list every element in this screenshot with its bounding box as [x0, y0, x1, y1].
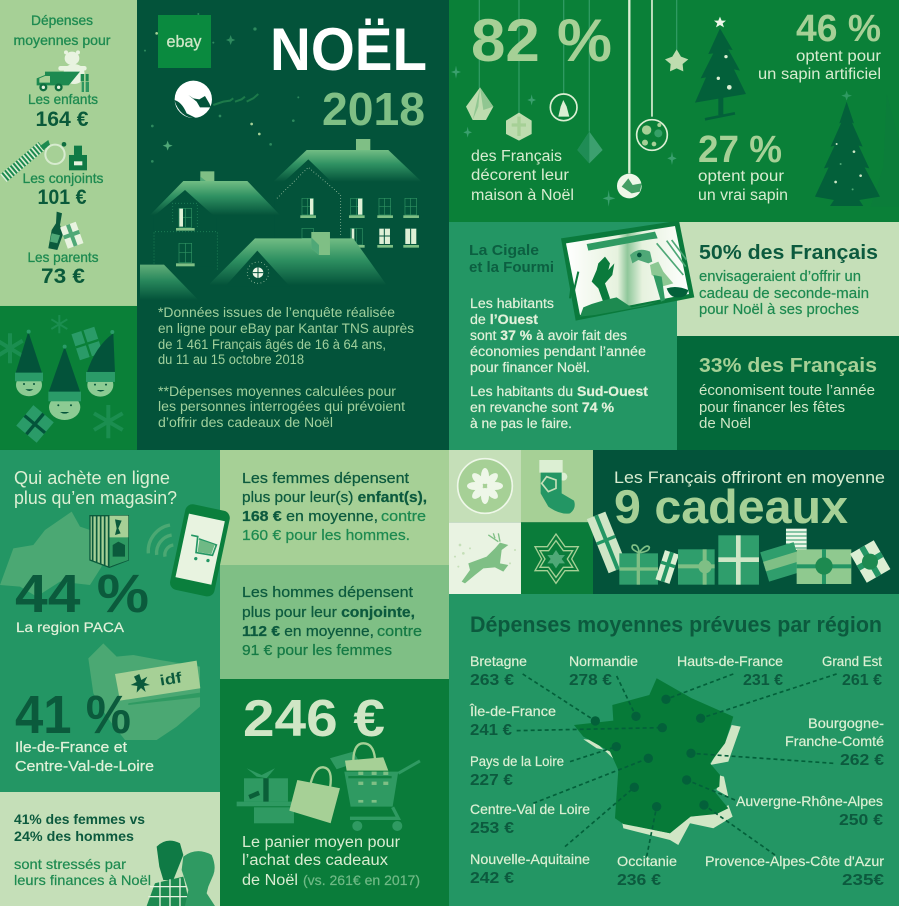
- text: économisent: pour financer les fêtes: [699, 400, 845, 416]
- text: hommes dépensent: plus pour leur conjointe,: [242, 605, 415, 621]
- heading: 33 %: 33% des Français: [699, 355, 877, 377]
- labels: regions: Bourgogne-: [808, 715, 884, 731]
- text: femmes vs hommes: [14, 812, 145, 844]
- elf: left: [15, 330, 43, 396]
- heading: qui achète: plus qu’en magasin?: [14, 488, 177, 508]
- labels: regions: Franche-Comté: [785, 733, 884, 749]
- labels: regions: Provence-Alpes-Côte d'Azur: [705, 853, 884, 869]
- text: des Français décorent: [471, 148, 574, 204]
- text: sources: **Dépenses moyennes calculées pour: [158, 384, 397, 399]
- panel: 33 % des Français: [677, 336, 899, 450]
- icon: toys: [37, 50, 89, 92]
- title: NOËL: NOËL: [270, 16, 427, 83]
- text: hommes dépensent: Les hommes dépensent: [242, 585, 413, 601]
- labels: regions: Pays de la Loire: [470, 753, 564, 769]
- text: seconde-main: [699, 269, 869, 318]
- labels: regions: Centre-Val de Loire: [470, 801, 590, 817]
- stat: 9 cadeaux: 9 cadeaux: [614, 480, 848, 533]
- text: des Français décorent: décorent leur: [471, 167, 569, 184]
- title: 2018: 2018: [322, 83, 425, 135]
- logo: ebay: ebay: [166, 32, 202, 51]
- panel: tiles: [449, 450, 593, 595]
- stat: 27 %: [698, 129, 788, 204]
- tile: stocking: [521, 450, 593, 522]
- house: front: [210, 232, 387, 287]
- text: habitants de l'Ouest: économies pendant l’année: [470, 344, 646, 359]
- panel: stress: [0, 792, 220, 906]
- text: sources: d’offrir des cadeaux de Noël: [158, 415, 333, 430]
- values: regions: 236 €: [617, 872, 661, 889]
- label: conjoints: 101 €: [38, 186, 87, 209]
- text: sources: *Données issues de l’enquête réalisée: [158, 305, 395, 320]
- panel: décorations et sapins: [449, 0, 899, 222]
- text: habitants de l'Ouest: pour financer Noël.: [470, 360, 590, 375]
- map: Ile-de-France: [88, 643, 200, 740]
- panel: elves: [0, 306, 137, 450]
- label: conjoints: Les conjoints: [22, 170, 104, 186]
- text: femmes vs hommes: 41% des femmes vs: [14, 812, 145, 827]
- house: back right: [273, 139, 422, 248]
- labels: regions: Hauts-de-France: [677, 653, 783, 669]
- label: enfants: Les enfants: [28, 91, 98, 107]
- labels: regions: Normandie: [569, 653, 638, 669]
- house: left: [150, 171, 280, 272]
- label: conjoints: [22, 170, 104, 209]
- heading: dépenses moyennes prévues par région: Dépenses moyennes prévues par région: [470, 612, 882, 637]
- icon: real tree: [815, 91, 899, 207]
- heading: dépenses moyennes pour: Dépenses: [31, 13, 93, 28]
- stat: 46 %: 46 %: [796, 8, 881, 50]
- heading: la cigale et la fourmi: [469, 242, 554, 276]
- text: offriront: Les Français offriront en moyenne: [614, 468, 885, 487]
- panel: dépenses moyennes: [0, 0, 137, 306]
- text: seconde-main: pour Noël à ses proches: [699, 302, 859, 318]
- icon: idf flag: [115, 661, 200, 705]
- text: femmes dépensent: contre: [381, 509, 426, 525]
- text: habitants de l'Ouest: Les habitants du Sud-Ouest: [470, 384, 649, 399]
- elf: right: [86, 330, 115, 397]
- stat: 41 %: 41 %: [15, 685, 131, 745]
- house: bottom left: [140, 265, 198, 300]
- panel: 9 cadeaux: [587, 450, 899, 594]
- labels: regions: Grand Est: [822, 653, 882, 669]
- text: habitants de l'Ouest: à ne pas le faire.: [470, 416, 572, 431]
- label: parents: 73 €: [41, 265, 85, 288]
- stat: 46 %: un sapin artificiel: [758, 66, 881, 83]
- text: Ile-de-France et Centre: Centre-Val-de-Loire: [15, 759, 154, 775]
- values: regions: 231 €: [743, 672, 783, 689]
- text: habitants de l'Ouest: Les habitants: [470, 296, 554, 311]
- icon: coat of arms: [90, 516, 128, 567]
- values: regions: 242 €: [470, 870, 514, 887]
- illustration: book: [561, 221, 694, 321]
- label: enfants: [28, 91, 98, 131]
- stat: 46 %: optent pour: [796, 48, 881, 65]
- icon: idf flag: idf: [159, 669, 184, 690]
- text: hommes dépensent: 91 € pour les femmes: [242, 643, 392, 659]
- panel: 50 % des Français: [677, 222, 899, 336]
- heading: la cigale et la fourmi: La Cigale: [469, 242, 539, 259]
- icon: phone: [148, 503, 231, 598]
- values: regions: 253 €: [470, 820, 514, 837]
- text: femmes dépensent: Les femmes dépensent: [242, 471, 409, 487]
- text: femmes dépensent: 168 € en moyenne,: [242, 509, 378, 525]
- panel: hommes: [220, 565, 449, 679]
- text: sources: [158, 305, 414, 430]
- text: panier moyen: (vs. 261€ en 2017): [303, 873, 420, 888]
- values: regions: 261 €: [842, 672, 882, 689]
- panel: femmes: [220, 450, 449, 565]
- text: des Français décorent: des Français: [471, 148, 562, 165]
- text: hommes dépensent: 112 € en moyenne,: [242, 624, 374, 640]
- text: panier moyen: Le panier moyen pour: [242, 834, 400, 851]
- gift: bottom: [16, 405, 54, 443]
- label: enfants: 164 €: [36, 108, 89, 131]
- text: femmes dépensent: plus pour leur(s) enfant(s),: [242, 490, 427, 506]
- leader lines: [517, 674, 837, 857]
- text: économisent: [699, 383, 875, 432]
- labels: regions: Nouvelle-Aquitaine: [470, 851, 590, 867]
- tile: snowflake: [449, 450, 521, 522]
- values: regions: 227 €: [470, 772, 513, 789]
- values: regions: 250 €: [839, 812, 883, 829]
- values: regions: 278 €: [569, 672, 612, 689]
- icon: man and woman: [147, 841, 215, 906]
- stat: 27 %: un vrai sapin: [698, 187, 788, 204]
- text: économisent: de Noël: [699, 416, 751, 432]
- heading: qui achète: Qui achète en ligne: [14, 468, 170, 488]
- text: la region PACA: La region PACA: [16, 619, 125, 635]
- stat: 27 %: optent pour: [698, 168, 784, 185]
- text: sources: du 11 au 15 octobre 2018: [158, 352, 304, 367]
- icon: gifts, bag and cart: [237, 743, 420, 831]
- icon: tie, watch, perfume: [3, 140, 87, 178]
- icon: artificial tree: [695, 17, 746, 119]
- text: habitants de l'Ouest: [470, 296, 649, 431]
- panel: panier moyen: [220, 679, 449, 906]
- label: parents: [28, 249, 98, 288]
- panel: dépenses par région: [449, 594, 899, 906]
- text: panier moyen: l’achat des cadeaux: [242, 852, 388, 869]
- labels: regions: Occitanie: [617, 853, 677, 869]
- heading: dépenses moyennes pour: [14, 13, 111, 48]
- text: Ile-de-France et Centre: [15, 740, 154, 775]
- illustration: gifts: [587, 512, 890, 585]
- stat: 44 %: 44 %: [15, 564, 149, 624]
- panel: la cigale et la fourmi: [449, 222, 677, 450]
- text: seconde-main: envisageraient d’offrir un: [699, 269, 861, 285]
- values: regions: 263 €: [470, 672, 514, 689]
- stat: 27 %: 27 %: [698, 129, 782, 171]
- icon: moon and sleigh: [174, 81, 258, 118]
- snowflakes: [0, 315, 123, 438]
- panel: qui achète en ligne: [0, 450, 231, 792]
- text: femmes dépensent: 160 € pour les hommes.: [242, 528, 410, 544]
- icon: bottle and gift: [48, 212, 83, 250]
- text: sources: les personnes interrogées qui prévoient: [158, 399, 405, 414]
- values: regions: 262 €: [840, 752, 884, 769]
- text: Ile-de-France et Centre: Ile-de-France et: [15, 740, 127, 756]
- heading: la cigale et la fourmi: et la Fourmi: [469, 259, 554, 276]
- text: stressés: [14, 856, 151, 888]
- text: hommes dépensent: [242, 585, 422, 659]
- text: panier moyen: de Noël: [242, 872, 298, 889]
- stat: 46 %: [758, 8, 881, 83]
- labels: regions: Bretagne: [470, 653, 527, 669]
- labels: regions: Auvergne-Rhône-Alpes: [736, 793, 883, 809]
- tile: reindeer: [449, 522, 521, 595]
- stars: [144, 13, 299, 163]
- labels: regions: Île-de-France: [469, 703, 556, 719]
- panel: hero: [137, 0, 449, 450]
- values: regions: 235€: [842, 872, 884, 889]
- text: femmes vs hommes: 24% des hommes: [14, 829, 134, 844]
- label: parents: Les parents: [28, 249, 98, 265]
- labels: regions: [469, 653, 884, 869]
- text: stressés: sont stressés par: [14, 856, 126, 872]
- values: regions: 241 €: [470, 722, 512, 739]
- text: sources: de 1 461 Français âgés de 16 à 64 ans,: [158, 337, 386, 352]
- tile: star: [521, 522, 593, 595]
- heading: 50 %: 50% des Français: [699, 242, 878, 264]
- gift: top: [71, 327, 103, 360]
- values: regions: [470, 672, 884, 889]
- text: des Français décorent: maison à Noël: [471, 187, 574, 204]
- text: seconde-main: cadeau de seconde-main: [699, 286, 869, 302]
- text: sources: en ligne pour eBay par Kantar TNS auprès: [158, 321, 414, 336]
- text: habitants de l'Ouest: sont 37 % à avoir fait des: [470, 328, 627, 343]
- logo: ebay: [158, 15, 211, 68]
- text: économisent: économisent toute l’année: [699, 383, 875, 399]
- stat: 246 €: 246 €: [243, 690, 385, 748]
- elf: centre: [48, 345, 81, 420]
- map: PACA: [0, 512, 102, 597]
- illustration: houses: [140, 139, 422, 300]
- ornaments: [451, 0, 688, 207]
- stat: 82 %: 82 %: [471, 7, 612, 74]
- heading: qui achète: [14, 468, 177, 508]
- heading: dépenses moyennes pour: moyennes pour: [14, 33, 111, 48]
- text: panier moyen: [242, 834, 420, 889]
- map: France: [574, 678, 741, 845]
- text: femmes dépensent: [242, 471, 427, 544]
- text: stressés: leurs finances à Noël: [14, 872, 151, 888]
- text: habitants de l'Ouest: en revanche sont 74 %: [470, 400, 614, 415]
- text: hommes dépensent: contre: [377, 624, 422, 640]
- text: habitants de l'Ouest: de l’Ouest: [470, 312, 539, 327]
